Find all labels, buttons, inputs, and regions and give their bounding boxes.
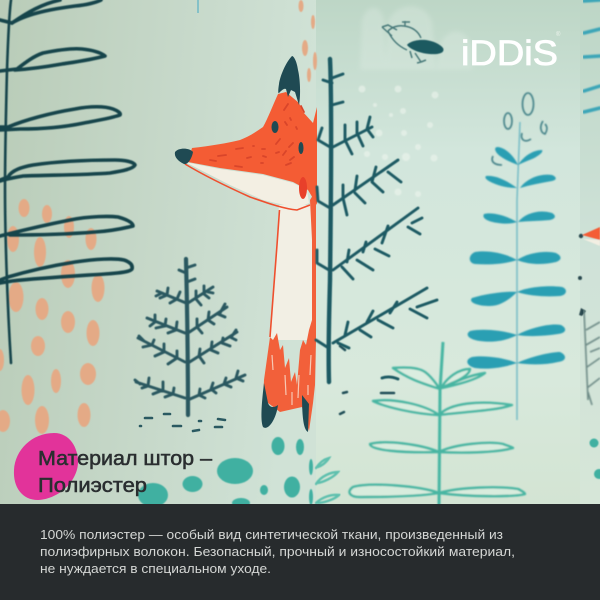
icon: bird [382, 21, 443, 63]
fox paws [261, 383, 309, 432]
fox left outline [270, 210, 280, 337]
heading: Полиэстер [38, 474, 147, 497]
fox body white [270, 205, 315, 340]
fox cheek spot [299, 177, 307, 199]
fox [175, 56, 317, 432]
fox chin line [185, 164, 310, 210]
panel: description band [0, 504, 600, 600]
logo: iDDiS: iDDiS [461, 34, 558, 73]
fox muzzle white [185, 162, 309, 208]
heading [38, 447, 213, 497]
pattern: green small leaves at fold [316, 458, 339, 503]
pattern: fox snout on right strip [578, 227, 600, 316]
description text [40, 527, 515, 576]
description text: 100% полиэстер — особый вид синтетической ткани, произведенный из [40, 527, 503, 542]
fox nose [175, 149, 193, 164]
teal plant stem [517, 122, 520, 420]
pattern: pale arches behind bird [360, 6, 472, 70]
fox body orange edge and tail [262, 190, 316, 431]
description text: полиэфирных волокон. Безопасный, прочный и износостойкий материал, [40, 544, 515, 559]
pattern: white bokeh dots [358, 86, 438, 197]
pattern: small dark tree [135, 259, 245, 415]
pattern: gray fern on right strip [584, 310, 600, 405]
pattern: dark dashes near green plant [340, 346, 394, 414]
heading: Материал штор – [38, 447, 213, 470]
pattern: tall dark tree [316, 59, 437, 382]
logo: iDDiS: ® [556, 31, 561, 38]
pattern: teal plant [467, 93, 566, 420]
fox fur marks [210, 104, 304, 167]
teal plant buds [492, 93, 547, 165]
fox head [188, 92, 317, 205]
pattern: green dots [138, 437, 600, 508]
pattern: peach dots [0, 0, 317, 434]
description text: не нуждается в специальном уходе. [40, 561, 271, 576]
pattern: ground dashes under small tree [140, 414, 225, 431]
fox tail white streaks [272, 355, 311, 405]
fox eyes [272, 121, 304, 154]
pattern: large dark fern at left [0, 0, 135, 363]
fox ear [278, 56, 300, 105]
pattern: small blue stem at top [197, 0, 199, 13]
pattern: right strip teal dashes [584, 0, 600, 112]
pattern: green plant [349, 342, 525, 505]
pink blob [14, 433, 78, 500]
teal plant leaves [467, 147, 566, 369]
